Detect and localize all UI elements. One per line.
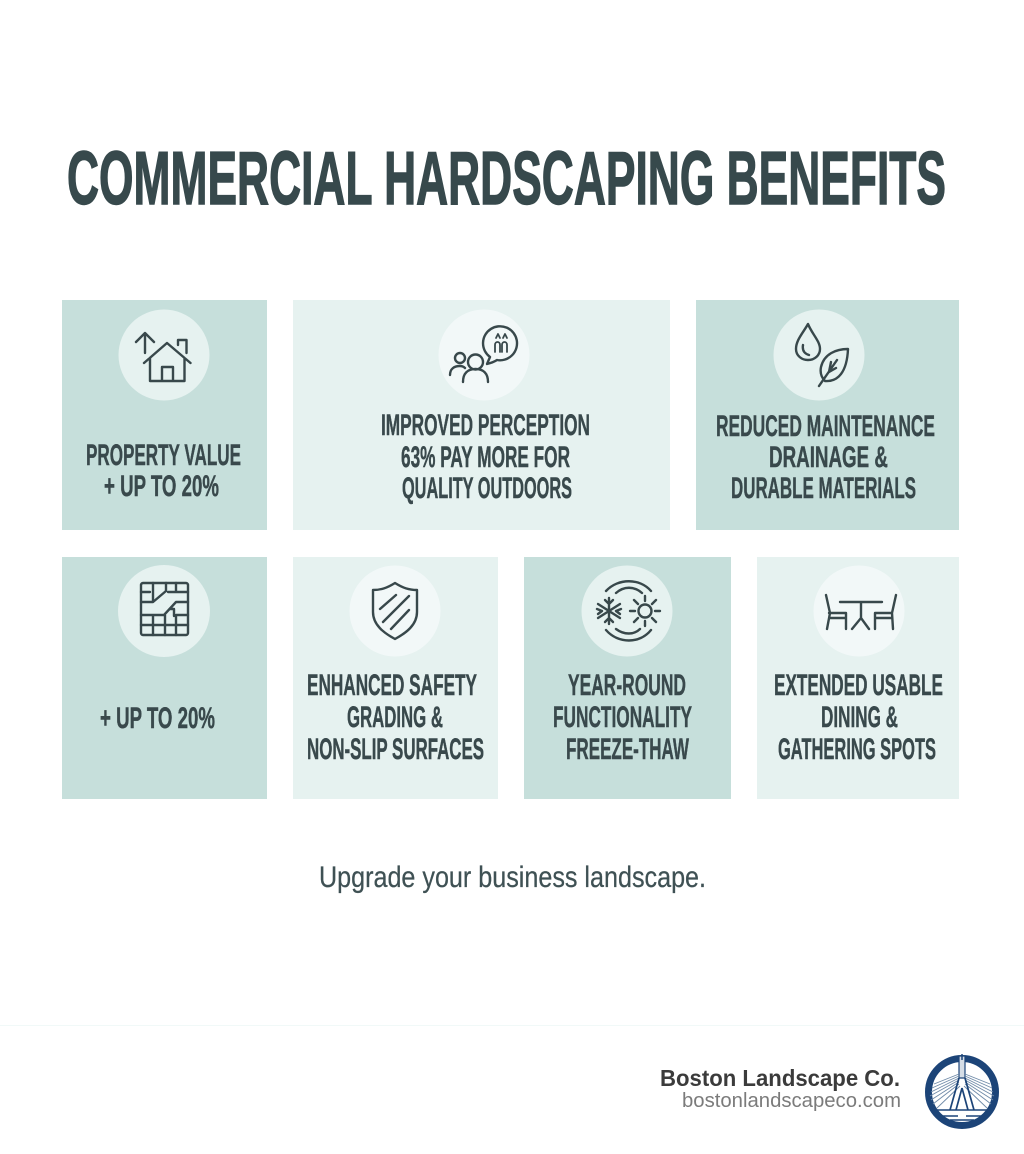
company name: Boston Landscape Co. bbox=[660, 1065, 900, 1091]
icon: shield bbox=[350, 566, 440, 656]
logo: bridge roundel bbox=[928, 1054, 996, 1126]
panel: extended usable bbox=[757, 557, 959, 799]
text: extended usable: DINING & bbox=[821, 701, 898, 734]
icon: paving pattern bbox=[118, 565, 210, 657]
text: property value: + UP TO 20% bbox=[104, 470, 219, 503]
text: improved perception: QUALITY OUTDOORS bbox=[402, 472, 572, 505]
text: year-round functionality: FREEZE-THAW bbox=[566, 733, 689, 766]
icon: table and chairs bbox=[814, 566, 904, 656]
text: year-round functionality: FUNCTIONALITY bbox=[553, 701, 692, 734]
text: reduced maintenance bbox=[716, 410, 935, 505]
panel: property value bbox=[62, 300, 267, 530]
panel: up to 20% bbox=[62, 557, 267, 799]
text: enhanced safety: ENHANCED SAFETY bbox=[307, 669, 477, 702]
icon: people with speech bubble bbox=[438, 310, 530, 400]
panel: reduced maintenance bbox=[696, 300, 959, 530]
tagline: Upgrade your business landscape. bbox=[319, 861, 706, 894]
website: bostonlandscapeco.com bbox=[682, 1090, 901, 1112]
text: enhanced safety: GRADING & bbox=[347, 701, 443, 734]
text: reduced maintenance: DRAINAGE & bbox=[769, 441, 888, 474]
text: enhanced safety: NON-SLIP SURFACES bbox=[307, 733, 484, 766]
text: extended usable bbox=[774, 669, 943, 766]
text: improved perception: IMPROVED PERCEPTION bbox=[381, 409, 590, 442]
text: up to 20%: + UP TO 20% bbox=[100, 702, 215, 735]
icon: water drop and leaf bbox=[774, 310, 864, 400]
text: property value: PROPERTY VALUE bbox=[86, 439, 241, 472]
panel: improved perception bbox=[293, 300, 670, 530]
text: enhanced safety bbox=[307, 669, 484, 766]
icon: house with rising arrow bbox=[118, 310, 210, 400]
text: improved perception: 63% PAY MORE FOR bbox=[401, 441, 570, 474]
text: improved perception bbox=[381, 409, 590, 505]
text: year-round functionality: YEAR-ROUND bbox=[568, 669, 686, 702]
footer brand bbox=[660, 1065, 901, 1112]
panel: year-round functionality bbox=[524, 557, 731, 799]
icon: snowflake and sun bbox=[582, 566, 672, 656]
text: property value bbox=[86, 439, 241, 503]
panel: enhanced safety bbox=[293, 557, 498, 799]
text: year-round functionality bbox=[553, 669, 692, 766]
